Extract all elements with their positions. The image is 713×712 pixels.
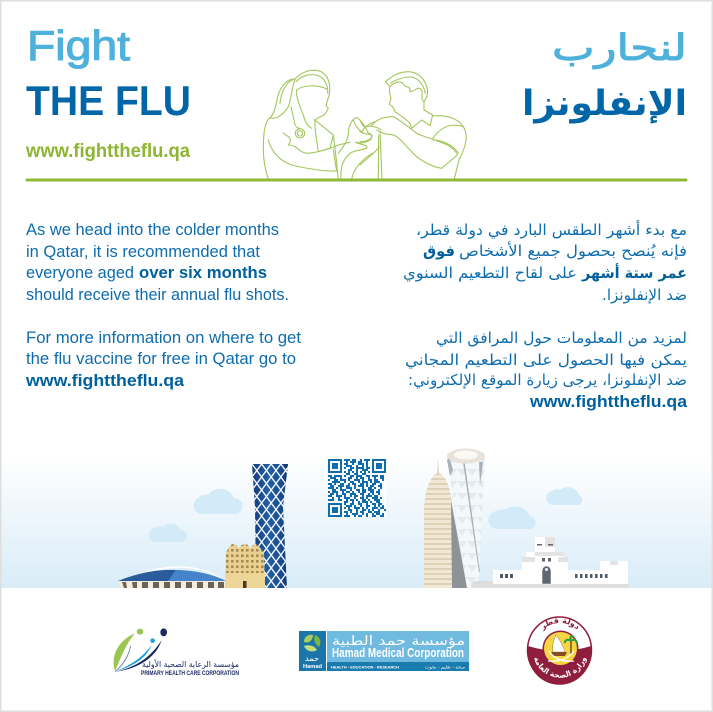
English text block: the flu vaccine for free in Qatar go to xyxy=(26,349,296,368)
man xyxy=(360,72,466,179)
title: Fight THE FLU (English): THE FLU xyxy=(26,77,191,124)
landmark: bullet tower xyxy=(424,458,452,588)
sky background xyxy=(2,455,712,588)
logo: Hamad Medical Corporation: Hamad Medical Corporation xyxy=(332,645,464,660)
Arabic text block: يمكن فيها الحصول على التطعيم المجاني xyxy=(405,351,687,370)
English text block: everyone aged xyxy=(26,263,134,282)
logo: Hamad Medical Corporation: مؤسسة حمد الطبية xyxy=(332,634,465,649)
English text block: should receive their annual flu shots. xyxy=(26,285,289,304)
logo: Ministry of Public Health crest xyxy=(526,616,592,685)
logo: Hamad Medical Corporation: Hamad xyxy=(303,664,322,670)
Arabic text block: ضد الإنفلونزا، يرجى زيارة الموقع الإلكتروني: xyxy=(408,371,687,390)
landmark: Museum of Islamic Art xyxy=(471,537,629,588)
Arabic text block: فوق xyxy=(423,242,455,260)
title: Arabic: الإنفلونزا xyxy=(522,84,687,124)
logo: Hamad Medical Corporation: صحة - تعليم - بحوث xyxy=(425,666,465,670)
divider line xyxy=(27,178,686,182)
English text block: in Qatar, it is recommended that xyxy=(26,242,260,261)
landmark: lattice tower xyxy=(252,464,288,588)
logo: Ministry of Public Health crest: وزارة الصحة العامة xyxy=(534,658,587,678)
title: Arabic: لنحارب xyxy=(552,28,687,69)
Arabic text block: عمر ستة أشهر xyxy=(581,263,687,282)
logo: Primary Health Care Corporation: مؤسسة الرعاية الصحية الأولية xyxy=(142,659,239,669)
website link top: www.fighttheflu.qa xyxy=(25,141,190,162)
logo: Hamad Medical Corporation: حمد xyxy=(305,654,319,663)
Arabic text block: www.fighttheflu.qa xyxy=(529,392,688,411)
logo: Primary Health Care Corporation: PRIMARY HEALTH CARE CORPORATION xyxy=(141,671,239,677)
landmark: traditional clay tower xyxy=(225,544,265,588)
Arabic text block: فإنه يُنصح بحصول جميع الأشخاص xyxy=(459,241,687,260)
QR code xyxy=(328,459,386,517)
nurse xyxy=(263,70,375,179)
illustration: nurse vaccinating a man xyxy=(263,70,466,179)
English text block: www.fighttheflu.qa xyxy=(25,371,185,390)
logo: Hamad Medical Corporation xyxy=(299,631,469,671)
English text block xyxy=(25,220,301,390)
English text block: As we head into the colder months xyxy=(26,220,279,239)
English text block: over six months xyxy=(139,263,267,282)
English text block: For more information on where to get xyxy=(26,328,301,347)
title: Fight THE FLU (English): Fight xyxy=(27,22,130,69)
Arabic text block: لمزيد من المعلومات حول المرافق التي xyxy=(436,329,687,348)
Arabic text block: مع بدء أشهر الطقس البارد في دولة قطر، xyxy=(416,220,687,240)
logo: Primary Health Care Corporation xyxy=(114,628,239,677)
Arabic text block xyxy=(403,220,688,411)
clouds xyxy=(149,487,582,542)
logo: Ministry of Public Health crest: دولة قطر xyxy=(543,618,578,632)
logo: Hamad Medical Corporation: HEALTH - EDUCATION - RESEARCH xyxy=(331,664,399,670)
Arabic text block: على لقاح التطعيم السنوي xyxy=(403,264,577,283)
landmark: stadium xyxy=(118,567,226,588)
title: Fight THE FLU (English) xyxy=(26,22,191,124)
landmark: twisted tower xyxy=(447,448,485,588)
Arabic text block: ضد الإنفلونزا. xyxy=(602,286,687,304)
title: Arabic xyxy=(522,28,687,124)
